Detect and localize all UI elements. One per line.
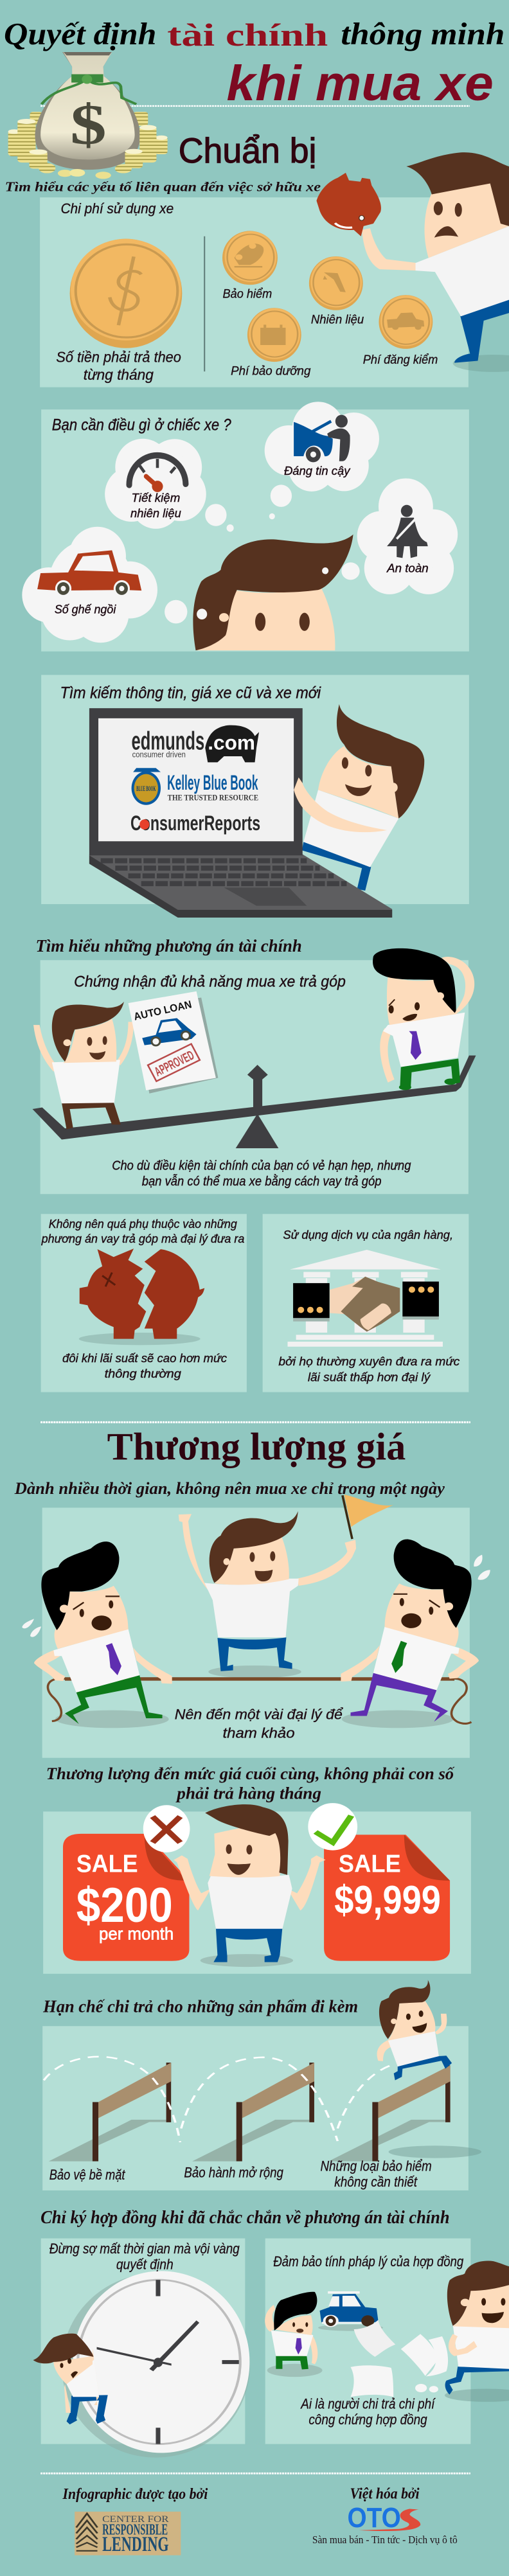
cloud: reliability [265, 402, 379, 492]
caption: Cho dù điều kiện tài chính của bạn có vẻ hạn hẹp, nhưng [112, 1159, 411, 1173]
icon: third hurdle [328, 2065, 451, 2162]
text: higher rates [62, 1351, 228, 1380]
icon: big dollar coin [70, 239, 182, 348]
icon: pointing arm [294, 777, 387, 832]
icon: second hurdle [192, 2063, 314, 2162]
text: bank heading: Sử dụng dịch vụ của ngân hàng, [283, 1228, 453, 1241]
tag: right sale: SALE [339, 1849, 401, 1878]
icon: left sweat drops [22, 1619, 41, 1637]
icon: maintenance battery coin [247, 308, 301, 362]
logo: Center for Responsible Lending: LENDING [102, 2532, 169, 2555]
heading: Tìm hiểu những phương án tài chính [36, 936, 302, 955]
cloud: seats: Số ghế ngồi [55, 602, 116, 616]
icon: man hanging on clock [33, 2334, 108, 2424]
icon: right sweat drops [474, 1555, 490, 1580]
logo: Kelley Blue Book: BLUE BOOK [136, 785, 156, 793]
icon: running man [445, 2261, 509, 2402]
icon: insurance coin [222, 231, 278, 285]
icon: money bag with coins [8, 52, 168, 179]
title line one [4, 17, 505, 53]
text: dealer warning [41, 1217, 244, 1245]
subheading: Dành nhiều thời gian, không nên mua xe chỉ trong một ngày [14, 1480, 445, 1498]
title line one: Quyết định [4, 17, 156, 51]
logo: edmunds: edmunds [132, 727, 204, 756]
panel: dealer financing warning [41, 1214, 247, 1392]
label: unnecessary insurance: Những loại bảo hiểm [321, 2158, 432, 2174]
text: don't rush: quyết định [116, 2256, 174, 2272]
icon: worried man [373, 948, 474, 1090]
icon: clock [62, 2271, 250, 2458]
logo: Center for Responsible Lending [75, 2512, 181, 2555]
panel: costs [40, 197, 469, 387]
icon: confused man [265, 2292, 323, 2377]
credit label: localized by: Việt hóa bởi [350, 2485, 420, 2502]
text: monthly payment: Số tiền phải trả theo [56, 349, 181, 366]
panel heading: Tìm kiếm thông tin, giá xe cũ và xe mới [60, 684, 321, 702]
icon: first hurdle [49, 2063, 171, 2162]
caption [112, 1159, 411, 1189]
icon: approved auto loan document [129, 991, 218, 1094]
icon: left puller [34, 1541, 172, 1724]
subheading: Tìm hiểu các yếu tố liên quan đến việc sở hữu xe [5, 179, 321, 195]
logo: Center for Responsible Lending: CENTER FOR [102, 2514, 169, 2524]
text: monthly payment [56, 349, 181, 383]
section: sale tags and hurdles [42, 1803, 481, 2190]
icon: central man with flag [179, 1495, 393, 1671]
text: notary fee: công chứng hợp đồng [308, 2411, 427, 2428]
text: dealer warning: Không nên quá phụ thuộc vào những [49, 1217, 237, 1230]
panel subheading: Chứng nhận đủ khả năng mua xe trả góp [74, 973, 346, 990]
text: bank rates: lãi suất thấp hơn đại lý [308, 1371, 431, 1384]
text: bank rates: bởi họ thường xuyên đưa ra mức [278, 1355, 460, 1368]
panel: tug of war [42, 1507, 470, 1758]
cloud: safety [357, 478, 458, 594]
section: needs and research panels [22, 402, 469, 918]
icon: pointing man [302, 704, 424, 891]
section: contract and credits [33, 2207, 509, 2555]
label: extended warranty: Bảo hành mở rộng [184, 2164, 283, 2180]
text: monthly payment: từng tháng [84, 366, 154, 383]
icon: seesaw [33, 1056, 476, 1148]
cloud: reliability: Đáng tin cậy [284, 464, 351, 477]
tag: right sale [324, 1834, 450, 1961]
section heading: Thương lượng giá: Thương lượng giá [107, 1425, 406, 1468]
text: higher rates: thông thường [105, 1367, 181, 1380]
subheading: final price: Thương lượng đến mức giá cuối cùng, không phải con số [46, 1765, 455, 1784]
icon: bank and handshake [288, 1250, 443, 1347]
text: dealer warning: phương án vay trả góp mà đại lý đưa ra [41, 1232, 244, 1245]
icon: money bag with coins: $ [70, 93, 107, 156]
text: don't rush: Đừng sợ mất thời gian mà vội vàng [49, 2241, 240, 2257]
logo: edmunds [132, 725, 259, 762]
caption: Nên đến một vài đại lý để [175, 1707, 344, 1723]
label: Nhiên liệu: Nhiên liệu [311, 312, 364, 326]
icon: cartoon man with piggy bank [316, 152, 509, 372]
caption: tham khảo [222, 1725, 295, 1741]
panel: pre-approval [40, 960, 469, 1194]
section: financing options [33, 936, 476, 1392]
credit label: created by: Infographic được tạo bởi [62, 2486, 208, 2503]
label: unnecessary insurance [321, 2158, 432, 2190]
icon: approved auto loan document: AUTO LOAN [132, 999, 193, 1023]
panel: research [41, 675, 469, 904]
subheading: final price: phải trả hàng tháng [175, 1784, 321, 1803]
icon: thought bubbles [165, 484, 360, 623]
title line one: tài chính [167, 18, 328, 53]
text: notary fee [300, 2395, 436, 2428]
tag: right sale: $9,999 [334, 1878, 441, 1923]
icon: flying paper sheets [351, 2320, 448, 2397]
logo: edmunds: .com [208, 731, 255, 754]
logo: Kelley Blue Book: THE TRUSTED RESOURCE [168, 793, 258, 803]
tag: left sale: SALE [76, 1849, 138, 1878]
panel: hurdles [42, 2026, 469, 2190]
icon: blue car [318, 2291, 383, 2331]
panel label: Chi phí sử dụng xe [60, 201, 174, 217]
section heading: Chuẩn bị: Chuẩn bị [179, 131, 316, 170]
subheading: accessories: Hạn chế chi trả cho những sản phẩm đi kèm [42, 1997, 358, 2016]
icon: thinking man head [193, 535, 353, 650]
tag: left sale: $200 [76, 1878, 173, 1932]
logo: edmunds: consumer driven [132, 750, 186, 759]
logo: Kelley Blue Book [132, 768, 258, 805]
icon: check badge [308, 1803, 357, 1851]
icon: right puller [341, 1540, 479, 1721]
cloud: seats [22, 527, 157, 643]
logo: Kelley Blue Book: Kelley Blue Book [167, 771, 258, 794]
icon: registration car coin [379, 295, 433, 349]
cloud: safety: An toàn [386, 561, 429, 574]
caption: bạn vẫn có thể mua xe bằng cách vay trả góp [142, 1175, 381, 1189]
label: surface protection: Bảo vệ bề mặt [49, 2167, 125, 2183]
icon: laptop [89, 708, 392, 918]
text: don't rush [49, 2241, 240, 2272]
text: higher rates: đôi khi lãi suất sẽ cao hơn mức [62, 1351, 228, 1365]
icon: broken piggy bank [79, 1248, 204, 1345]
logo: OTOS: OTO [347, 2502, 401, 2534]
logo: Consumer Reports: ConsumerReports [130, 812, 260, 835]
caption [175, 1707, 344, 1741]
tag: left sale [63, 1834, 189, 1961]
panel: what you need [41, 409, 469, 652]
panel: legal contract [265, 2239, 470, 2444]
icon: cross badge [143, 1805, 190, 1852]
cloud: fuel economy: Tiết kiệm [132, 491, 180, 504]
label: unnecessary insurance: không cần thiết [334, 2173, 418, 2190]
section: header and cost panel [4, 17, 509, 387]
panel: take your time [41, 2239, 245, 2444]
icon: jumping man [377, 1980, 481, 2158]
logo: Center for Responsible Lending: RESPONSIBLE [102, 2521, 168, 2538]
label: Phí bảo dưỡng: Phí bảo dưỡng [231, 364, 310, 378]
section: negotiate [14, 1422, 490, 1803]
icon: shadows [55, 1666, 454, 1728]
label: Phí đăng kiểm: Phí đăng kiểm [363, 353, 438, 367]
icon: approved auto loan document: APPROVED [152, 1048, 197, 1079]
panel heading: Bạn cần điều gì ở chiếc xe ? [52, 416, 231, 434]
text: bank rates [278, 1355, 460, 1384]
icon: fuel coin [309, 256, 363, 310]
cloud: fuel economy: nhiên liệu [130, 506, 181, 520]
icon: happy man [33, 1002, 134, 1129]
panel: sale tags [43, 1811, 471, 1974]
icon: man holding tags [174, 1804, 326, 1967]
tag: left sale: per month [99, 1924, 174, 1943]
panel: bank services [263, 1214, 469, 1392]
icon: jump path [44, 2057, 389, 2142]
icon: rope [48, 1678, 471, 1723]
label: Bảo hiểm: Bảo hiểm [222, 287, 272, 301]
subheading: final price [46, 1765, 455, 1803]
cloud: fuel economy [105, 439, 206, 529]
